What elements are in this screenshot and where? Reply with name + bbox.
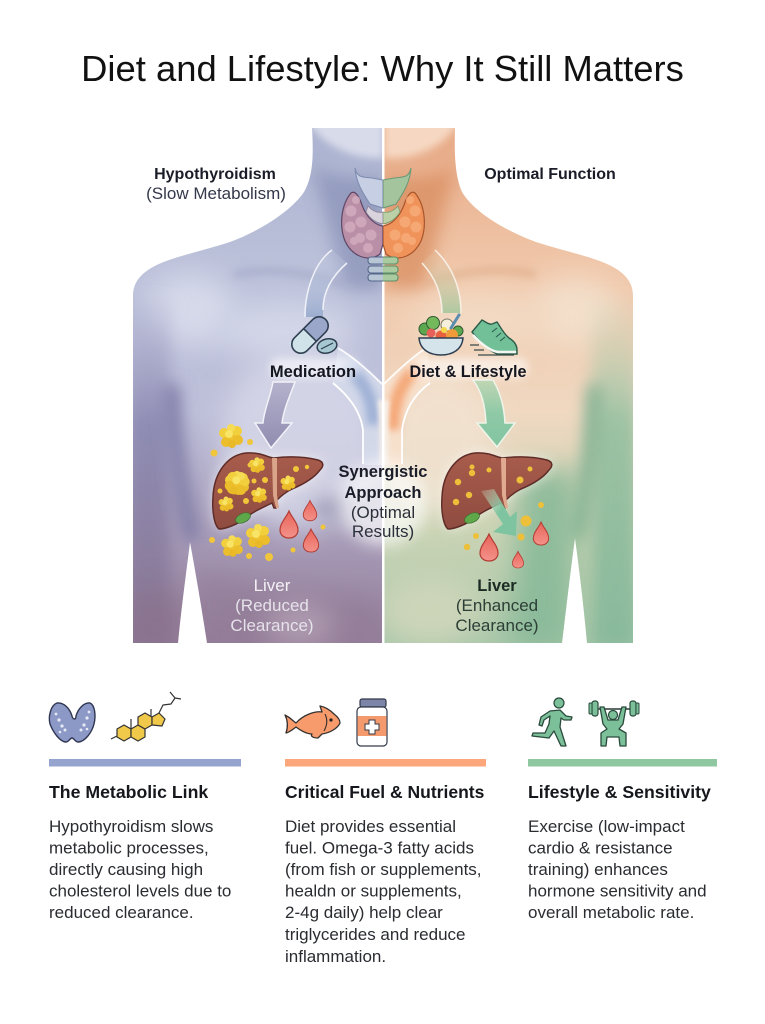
icon: thyroid gland [49,703,95,742]
label: liver reduced clearance [230,576,314,635]
label: liver enhanced clearance: (Enhanced [456,596,538,615]
arrow: medication to liver [255,382,295,448]
label: medication: Medication [270,363,356,381]
text block: reduced clearance. [49,903,194,922]
heading: Critical Fuel & Nutrients [285,782,485,802]
label: synergistic approach: (Optimal [351,503,415,522]
bar [285,759,486,766]
arrow: diet and lifestyle to liver [473,380,515,447]
label: liver enhanced clearance: Liver [477,577,517,595]
panel: critical fuel and nutrients [285,699,486,966]
text block: healdn or supplements, [285,882,462,900]
label: synergistic approach: Approach [344,484,422,502]
icon: weightlifter [589,701,639,746]
text block: hormone sensitivity and [528,882,707,900]
text block: overall metabolic rate. [528,903,694,922]
text block: Hypothyroidism slows [49,817,213,836]
panel: the metabolic link [49,692,241,922]
label: liver reduced clearance: Clearance) [230,616,314,635]
text block [285,817,482,966]
label: liver reduced clearance: Liver [254,576,291,595]
text block: Diet provides essential [285,817,456,836]
synergy bands [333,348,430,465]
icon: pill capsule and tablet [288,313,338,357]
icon: cholesterol molecule [111,692,181,741]
icon: liver, enhanced clearance [442,453,552,568]
torso: hypothyroid side [120,120,384,650]
label: synergistic approach: Synergistic [339,463,427,481]
text block: training) enhances [528,860,668,879]
label: hypothyroidism: Hypothyroidism [154,166,276,183]
icon: running shoe [470,320,517,355]
label: synergistic approach [339,461,427,545]
illustration: split torso [120,120,647,650]
text block: metabolic processes, [49,838,209,858]
icon: thyroid, healthy half [378,168,424,281]
label: diet and lifestyle: Diet & Lifestyle [410,363,526,381]
text block: 2-4g daily) help clear [285,903,443,922]
heading: The Metabolic Link [49,782,208,802]
icon: fish [285,706,340,738]
arrow: thyroid to medication [305,250,347,317]
label glow [270,358,528,378]
icon: fatty liver, reduced clearance [209,424,326,561]
text block [528,817,707,922]
text block: (from fish or supplements, [285,860,482,879]
label: hypothyroidism [146,166,286,203]
icon: salad bowl [419,315,463,355]
text block [49,817,231,922]
heading: Lifestyle & Sensitivity [528,782,711,802]
title: Diet and Lifestyle: Why It Still Matters [81,48,684,89]
label: optimal function: Optimal Function [484,166,616,183]
centre divider [382,128,384,643]
arrow: thyroid to diet and lifestyle [422,250,461,313]
text block: Exercise (low-impact [528,817,685,836]
label: liver enhanced clearance: Clearance) [455,616,539,635]
text block: triglycerides and reduce [285,925,465,944]
panel: lifestyle and sensitivity [528,698,717,922]
text block: fuel. Omega-3 fatty acids [285,838,474,858]
label: liver enhanced clearance [455,577,539,635]
label: hypothyroidism: (Slow Metabolism) [146,184,286,203]
text block: directly causing high [49,860,203,879]
text block: cardio & resistance [528,838,673,858]
label: liver reduced clearance: (Reduced [235,596,309,615]
icon: supplement bottle [357,699,387,746]
text block: inflammation. [285,947,386,966]
icon: runner [532,698,572,746]
bar [49,759,241,766]
icon: thyroid, hypothyroid half [342,168,388,281]
label: synergistic approach: Results) [352,522,414,541]
torso: healthy side [380,120,647,650]
bar [528,759,717,766]
text block: cholesterol levels due to [49,882,231,900]
